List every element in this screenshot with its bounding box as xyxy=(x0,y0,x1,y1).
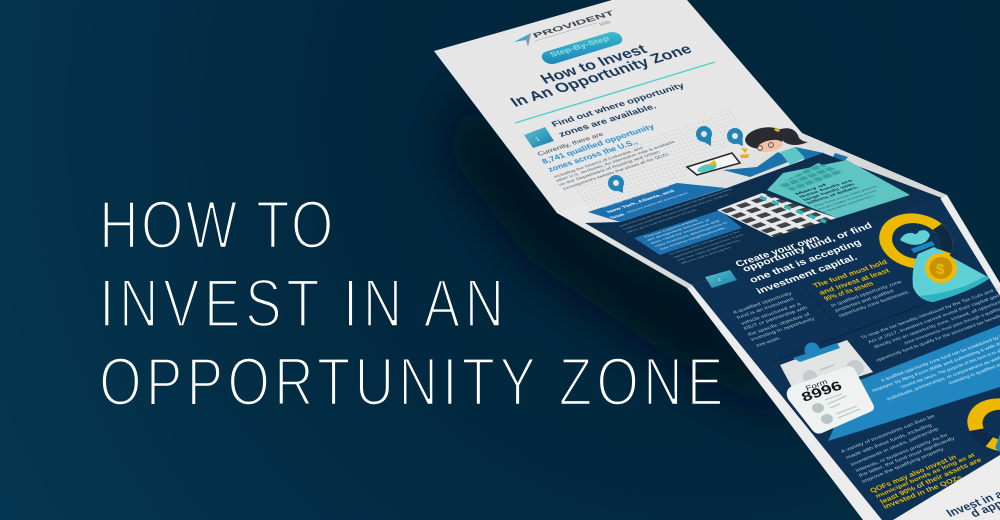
step-by-step pill: Step-By-Step xyxy=(548,34,612,59)
panel: second blue callout: new economic development in xyxy=(653,221,729,247)
paper drop shadow xyxy=(445,90,800,430)
step 1 text block: other U.S. territories. An interactive map is available xyxy=(555,140,676,183)
logo: PROVIDENT xyxy=(531,9,617,40)
yellow callout: fund must hold: and invest at least xyxy=(817,266,892,297)
text block: fold body 2: different states and regions. xyxy=(679,246,733,264)
face xyxy=(756,138,784,154)
text block: qualified opportunity fund: fund is an investment xyxy=(736,296,796,321)
hand xyxy=(827,166,839,170)
step 2 heading xyxy=(733,221,875,296)
yellow callout: fund must hold xyxy=(811,258,892,303)
sparkle shapes xyxy=(740,148,749,158)
step 1 text block: on the Department of Housing and Urban xyxy=(558,150,661,187)
text block: variety of investments: the latter, the fund must significantly xyxy=(858,436,957,479)
step 1 badge xyxy=(524,127,554,148)
step 2 heading: opportunity fund, or find xyxy=(740,221,875,274)
teal divider xyxy=(515,62,715,123)
panel: lower white margin xyxy=(687,195,1000,520)
scrunchie xyxy=(774,128,780,132)
text block: fold body 2: may own many properties across xyxy=(675,239,741,261)
form number: 8996 xyxy=(799,378,844,405)
icon: clipboard form 8996 xyxy=(780,340,874,434)
hair xyxy=(744,125,786,151)
panel: teal note: and give smaller investors access xyxy=(816,189,878,210)
panel: teal note: billions of dollars. xyxy=(806,186,860,204)
title xyxy=(102,202,720,404)
text block: variety of investments: made with these funds, including xyxy=(845,423,934,461)
panel: New York callout: among the locations with growing projects xyxy=(625,192,689,213)
yellow callout: QOFs: invested in the QOZs. xyxy=(881,472,966,511)
step 1 text block: Currently, there are xyxy=(536,131,606,158)
panel: second blue callout: low-income neighborhoods. xyxy=(658,226,728,250)
text block: variety of investments: A variety of investments can then be xyxy=(840,414,936,455)
text block: fold body 2: An investor does not have to live in the xyxy=(667,230,741,255)
step 1 heading xyxy=(549,81,686,139)
step 1 badge: 1 xyxy=(534,136,542,143)
panel: blue band: taxpayer by filing Form 8996 and submitting it with their xyxy=(871,339,1000,393)
text block: variety of investments xyxy=(840,414,957,485)
step 2 heading: investment capital. xyxy=(754,253,860,296)
text block: fold body 2 xyxy=(667,230,745,264)
step-by-step pill xyxy=(538,30,626,66)
text block: fold body 2: opportunity zone to invest there. Funds xyxy=(671,233,745,258)
text block: qualified opportunity fund: REIT or partnership with xyxy=(743,305,810,332)
ponytail xyxy=(777,128,808,145)
text block: qualified opportunity fund: investing in opportunity xyxy=(750,316,817,343)
panel: second blue callout: their need for investment and xyxy=(649,220,721,244)
step 1 text block xyxy=(536,122,676,191)
title: INVEST IN AN xyxy=(99,266,504,342)
step 1 text block: zones across the U.S., xyxy=(546,138,639,174)
torso xyxy=(780,147,805,165)
building illustration xyxy=(717,193,837,237)
panel: teal note: Many of xyxy=(794,183,829,195)
illustration: person with tablet xyxy=(687,125,848,177)
panel: blue band: individuals, partnerships, or corporations as well as xyxy=(886,353,1000,401)
text block: fold body 1: Investors can review each tract and compare local economic conditions. xyxy=(621,193,731,230)
text block: qualified opportunity fund: vehicle structured as a xyxy=(740,301,803,327)
yellow callout: QOFs xyxy=(868,453,983,511)
yellow callout: fund must hold: The fund must hold xyxy=(811,258,889,290)
sleeves xyxy=(723,147,848,177)
panel: folded middle white margin xyxy=(557,133,947,288)
text block: qualified properties xyxy=(830,279,911,319)
text block: variety of investments: improve the qualifying property. xyxy=(861,446,946,485)
map dots xyxy=(573,108,743,210)
panel: New York callout: New York, Atlanta, and xyxy=(606,189,677,214)
text block: tax benefits xyxy=(860,283,1000,362)
panel: blue band xyxy=(828,325,1000,441)
step 1 text block: 8,741 qualified opportunity xyxy=(540,122,657,166)
form card xyxy=(787,366,874,434)
chart: gold donut xyxy=(865,204,967,278)
text block: qualified opportunity fund: A qualified opportunity xyxy=(732,291,794,316)
text block: tax benefits: opportunity fund to qualify for the associated tax benefits. xyxy=(875,312,1000,362)
text block: tax benefits: To reap the tax benefits introduced by the Tax Cuts and Jobs xyxy=(860,283,1000,340)
panel: teal note xyxy=(767,160,910,218)
tablet xyxy=(687,153,740,175)
yellow callout: fund must hold: 90% of its assets xyxy=(822,279,875,303)
logo xyxy=(514,9,617,47)
step 1 text block: including the District of Columbia, and xyxy=(553,146,644,179)
main heading: In An Opportunity Zone xyxy=(507,42,696,110)
clipboard clip xyxy=(793,342,840,362)
step 1 text block: Development's website that shows all the QOZs. xyxy=(562,152,671,191)
panel: second blue callout: are designated because of xyxy=(645,219,711,241)
icon: money bag xyxy=(900,230,990,302)
icon: location pin xyxy=(696,126,712,146)
text block: tax benefits: zone investments must pass through a qualified xyxy=(903,306,1000,345)
panel: top white section xyxy=(434,0,830,250)
text block: qualified opportunity fund: zone assets. xyxy=(755,336,782,349)
text block: tax benefits: Act of 2017, investors cannot invest their capital gains xyxy=(867,291,1000,344)
text block: variety of investments: investments in stocks, partnership xyxy=(850,426,940,468)
panel: dark fold section xyxy=(585,153,942,285)
yellow callout: QOFs: least 90% of their assets are xyxy=(878,456,983,506)
chart: second gold donut xyxy=(951,387,1000,463)
panel: second blue callout: These communities xyxy=(642,219,699,238)
panel: New York callout: Texas xyxy=(609,213,627,220)
step 2 badge xyxy=(705,270,737,288)
form rows xyxy=(812,403,833,424)
text block: qualified properties: opportunity zone businesses. xyxy=(838,289,911,319)
panel: New York callout xyxy=(588,183,726,222)
text block: qualified properties: In qualified opportunity zone xyxy=(830,279,904,309)
icon: location pin xyxy=(608,175,624,193)
yellow callout: QOFs: QOFs may also invest in xyxy=(868,453,958,495)
clipboard back sheet xyxy=(780,340,873,397)
panel: teal note: to diversified opportunities. xyxy=(820,194,876,213)
text block: qualified opportunity fund: the specific objective of xyxy=(747,312,812,338)
step 1 heading: Find out where opportunity xyxy=(549,81,686,129)
step 2 heading: one that is accepting xyxy=(747,238,864,285)
text block: fold body 1: Some of the zones are located in large cities where real estate demand is strong. xyxy=(617,188,734,227)
title: OPPORTUNITY ZONE xyxy=(99,344,723,420)
panel: teal note: large funds with xyxy=(802,182,856,201)
icon: location pin xyxy=(727,128,743,146)
form label: Form xyxy=(804,377,829,393)
yellow callout: QOFs: municipal bonds as long as at xyxy=(875,453,976,500)
text block: variety of investments: interests, or business property. As for xyxy=(855,432,950,474)
logo: 1031 xyxy=(598,19,612,27)
icon: gold coin: $ xyxy=(936,261,945,278)
glasses xyxy=(758,143,773,150)
panel: second blue callout xyxy=(634,210,742,255)
title: HOW TO xyxy=(99,187,333,263)
panel: teal note: these funds are xyxy=(798,179,854,198)
step 1 heading: zones are available. xyxy=(556,101,658,139)
step 2 heading: Create your own xyxy=(733,234,822,269)
main heading: How to Invest xyxy=(537,42,650,87)
text block: tax benefits: directly into an opportunity zone. Instead, all opportunity xyxy=(873,298,1000,349)
text block: qualified opportunity fund xyxy=(732,291,817,349)
panel: teal note: They invest across many projects xyxy=(812,185,878,207)
step 2 badge: 2 xyxy=(717,277,723,282)
panel: blue band: A qualified opportunity zone fund can be established by the xyxy=(880,332,1000,382)
panel: bottom white section xyxy=(893,455,1000,520)
text block: qualified properties: properties and qualified xyxy=(834,288,896,314)
panel: folded infographic sheet xyxy=(434,0,1000,520)
panel: dark main section xyxy=(692,198,1000,520)
text block: fold body 1: Others are in rural and underserved areas. xyxy=(625,208,699,233)
panel: New York callout: Several major cities have opportunity zones: xyxy=(600,185,671,208)
